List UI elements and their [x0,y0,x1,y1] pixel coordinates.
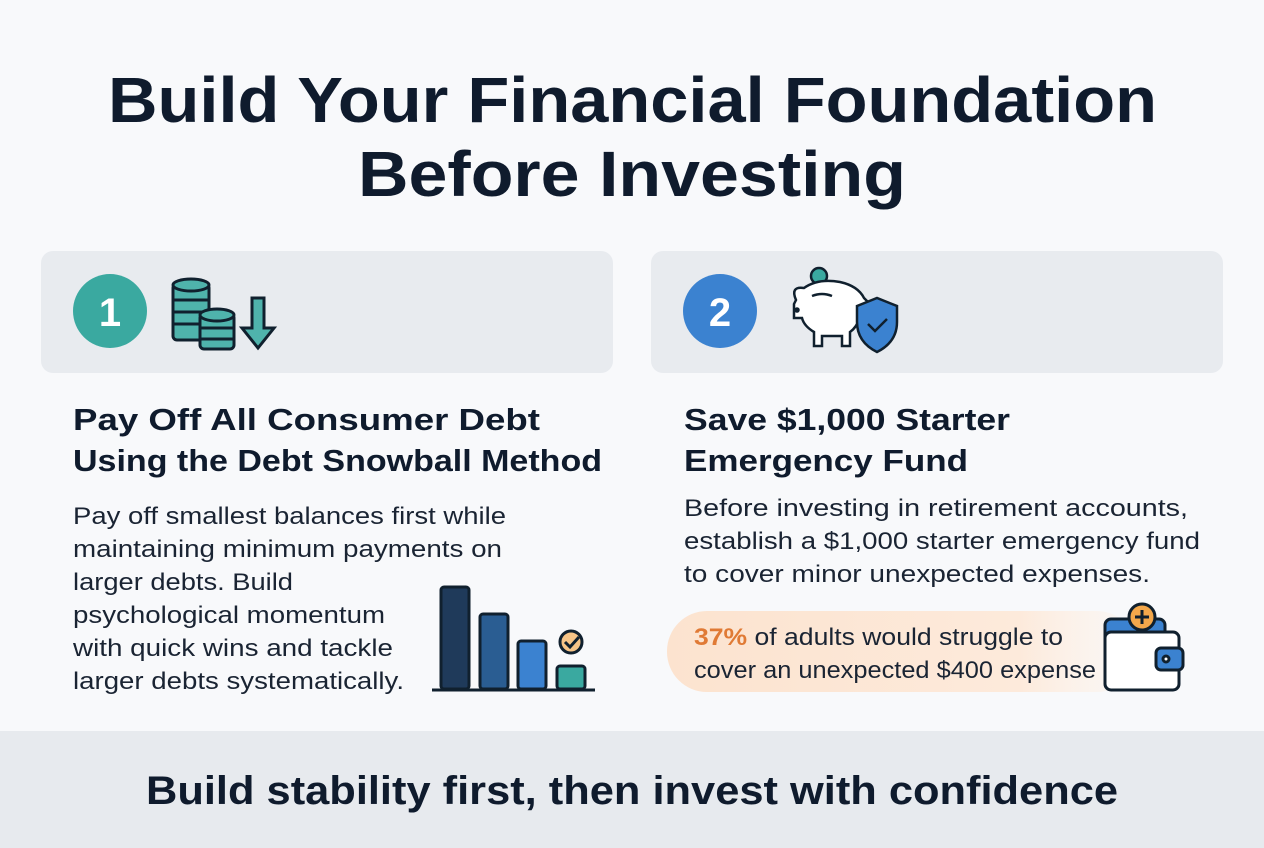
heading: step 2: Save $1,000 Starter [684,402,1010,437]
panel: step 1 header [41,251,613,373]
text block: step 1 body: maintaining minimum payments on [73,536,502,563]
icon: piggy bank with shield [794,268,897,352]
text block: step 1 body: larger debts systematically. [73,668,404,695]
text block: step 2 body: Before investing in retirement accounts, [684,495,1188,522]
text block: step 2 body: to cover minor unexpected expenses. [684,561,1150,588]
title [108,64,1157,210]
badge 1 [73,274,147,348]
text block: step 1 body [72,503,506,695]
callout: statistic: 37% of adults would struggle to [694,624,1063,651]
heading: step 2: Emergency Fund [684,443,968,478]
icon: coins with down arrow [173,279,274,349]
title: Before Investing [358,138,906,210]
heading: step 1 [73,402,602,478]
badge 1: 1 [99,291,121,335]
callout: statistic: cover an unexpected $400 expense [694,657,1096,684]
badge 2 [683,274,757,348]
callout: statistic [667,604,1183,692]
text block: step 1 body: Pay off smallest balances first while [73,503,506,530]
text block: step 1 body: with quick wins and tackle [72,635,393,662]
heading: step 1: Pay Off All Consumer Debt [73,402,540,437]
text block: step 2 body: establish a $1,000 starter emergency fund [684,528,1200,555]
heading: step 2 [684,402,1010,478]
chart: snowball bars [432,587,595,690]
badge 2: 2 [709,291,731,335]
title: Build Your Financial Foundation [108,64,1157,136]
text block: step 2 body [684,495,1200,588]
footer banner [0,731,1264,848]
panel: step 2 header [651,251,1223,373]
heading: step 1: Using the Debt Snowball Method [73,443,602,478]
icon: wallet [1105,604,1183,690]
text block: step 1 body: psychological momentum [73,602,385,629]
footer banner: Build stability first, then invest with confidence [146,769,1118,813]
text block: step 1 body: larger debts. Build [73,569,293,596]
